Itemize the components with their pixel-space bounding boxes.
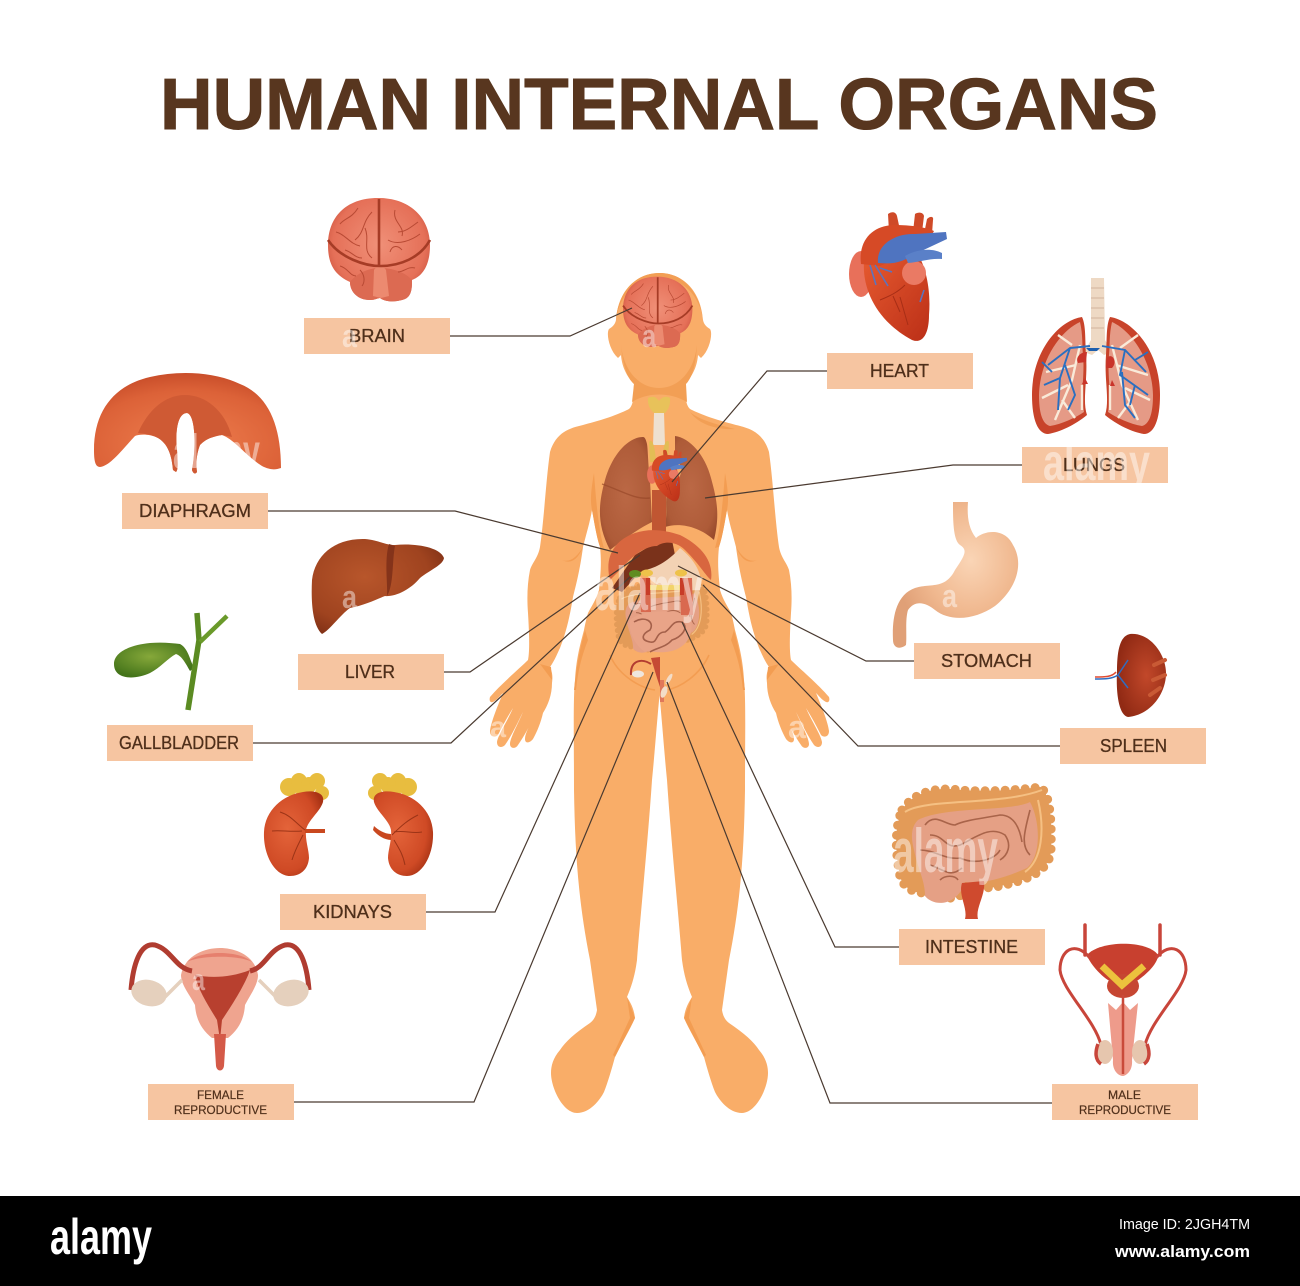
footer logo: alamy <box>50 1209 152 1265</box>
watermarks: a <box>342 579 357 615</box>
small large intestine <box>616 584 707 653</box>
label: male reproductive <box>1052 1084 1198 1120</box>
label: brain: BRAIN <box>349 326 405 346</box>
icon: spleen <box>1095 634 1166 717</box>
icon: heart <box>849 212 947 341</box>
small diaphragm <box>608 530 711 580</box>
label: spleen <box>1060 728 1206 764</box>
label: kidneys: KIDNAYS <box>313 902 392 922</box>
small thyroid and trachea <box>648 397 670 462</box>
small aorta <box>652 490 666 535</box>
small uterus <box>631 657 660 687</box>
label: female reproductive: FEMALE <box>197 1088 244 1102</box>
icon: liver <box>312 539 444 634</box>
label: male reproductive: REPRODUCTIVE <box>1079 1103 1171 1117</box>
label: diaphragm <box>122 493 268 529</box>
label: brain <box>304 318 450 354</box>
watermarks: a <box>490 711 506 744</box>
small kidneys and adrenals <box>640 570 693 615</box>
icon: gallbladder <box>114 613 227 710</box>
label: stomach: STOMACH <box>941 651 1032 671</box>
small lungs <box>600 436 717 550</box>
watermarks: alamy <box>173 426 260 479</box>
watermarks: a <box>642 318 656 354</box>
watermarks <box>173 318 1150 997</box>
label: lungs <box>1022 447 1168 483</box>
label: liver: LIVER <box>345 662 395 682</box>
icon: female reproductive <box>128 945 312 1070</box>
icon: lungs <box>1032 278 1160 434</box>
label: intestine: INTESTINE <box>925 937 1018 957</box>
label: diaphragm: DIAPHRAGM <box>139 501 251 521</box>
watermarks: a <box>192 964 205 997</box>
label: heart <box>827 353 973 389</box>
watermarks: alamy <box>1043 434 1150 492</box>
neck and jaw shading <box>621 345 697 402</box>
label: spleen: SPLEEN <box>1100 736 1167 756</box>
footer image id: Image ID: 2JGH4TM <box>1119 1216 1250 1233</box>
icon: male reproductive <box>1060 925 1186 1076</box>
watermarks: alamy <box>893 817 998 886</box>
label: stomach <box>914 643 1060 679</box>
small intestine loops <box>630 611 692 652</box>
internal organs inside the body <box>600 277 717 702</box>
label: heart: HEART <box>870 361 929 381</box>
label: male reproductive: MALE <box>1108 1088 1141 1102</box>
label: intestine <box>899 929 1045 965</box>
icon: stomach <box>893 502 1018 648</box>
small lung folds <box>602 484 650 498</box>
footer bar <box>0 1196 1300 1286</box>
label: gallbladder: GALLBLADDER <box>119 733 239 753</box>
small liver and stomach <box>612 540 701 592</box>
leader lines <box>253 308 1060 1103</box>
label: female reproductive <box>148 1084 294 1120</box>
small heart <box>647 450 687 501</box>
watermarks: a <box>788 709 806 745</box>
small male organs <box>659 673 674 702</box>
icon: diaphragm <box>94 373 281 473</box>
small gallbladder <box>629 570 641 578</box>
icon: intestine <box>896 787 1051 919</box>
small brain <box>623 277 692 348</box>
footer url: www.alamy.com <box>1114 1242 1250 1261</box>
label: liver <box>298 654 444 690</box>
watermarks: a <box>942 578 957 614</box>
title: HUMAN INTERNAL ORGANS <box>160 65 1158 145</box>
watermarks: alamy <box>595 555 703 624</box>
label: kidneys <box>280 894 426 930</box>
label: lungs: LUNGS <box>1063 455 1125 475</box>
watermarks: a <box>342 318 357 354</box>
label: gallbladder <box>107 725 253 761</box>
icon: kidneys <box>264 773 433 876</box>
label: female reproductive: REPRODUCTIVE <box>174 1103 267 1117</box>
human body figure <box>490 273 829 1113</box>
icon: brain <box>328 198 430 301</box>
